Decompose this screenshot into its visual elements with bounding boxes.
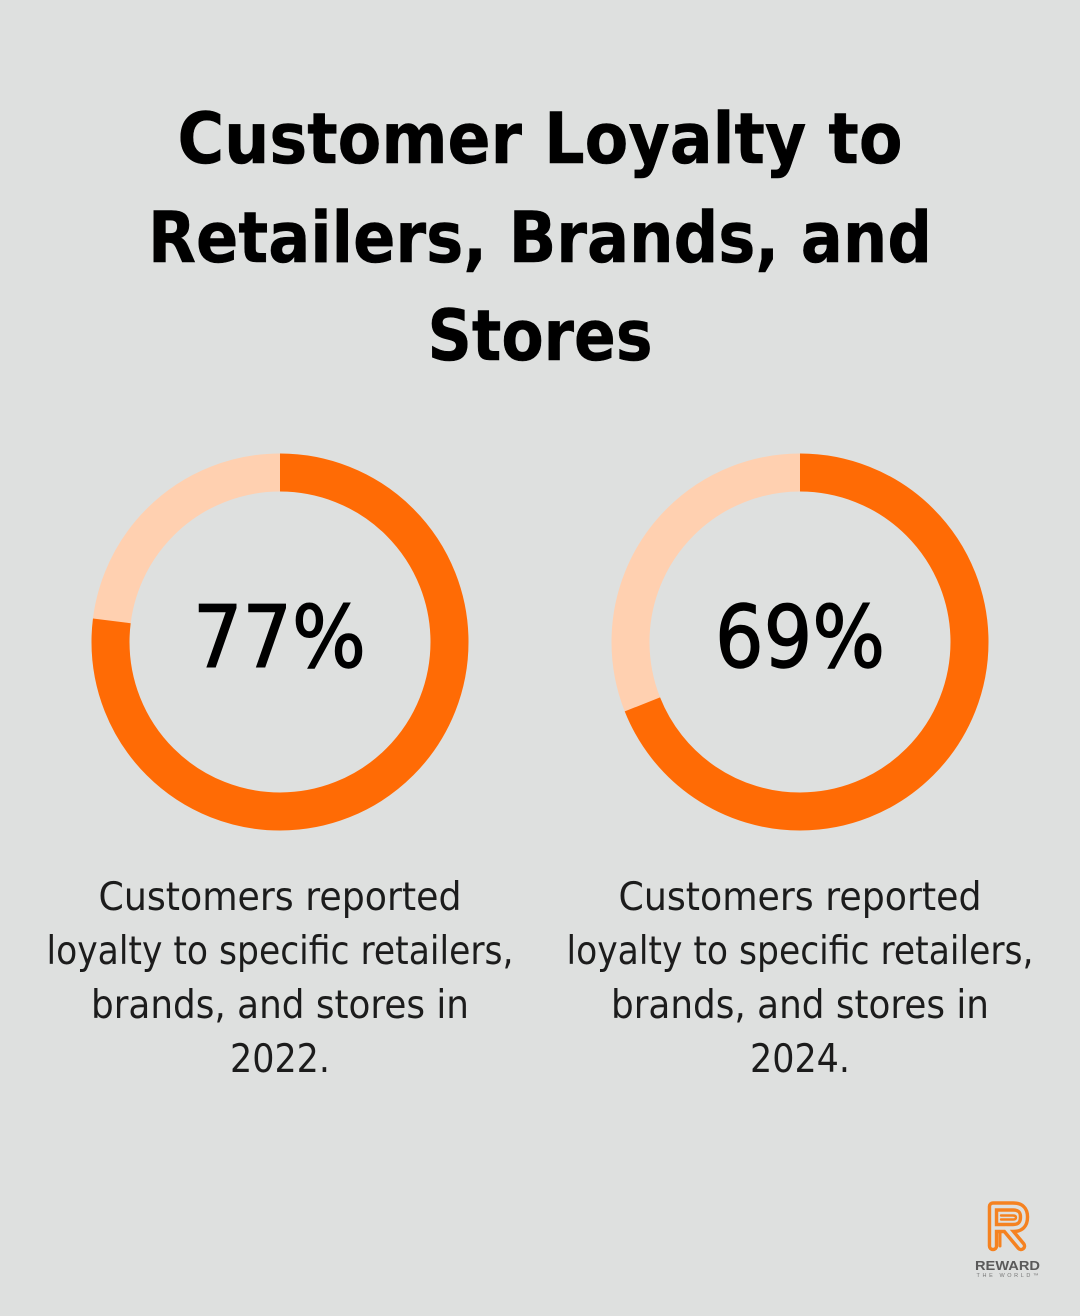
icon: R mark <box>993 1206 1024 1246</box>
description: 2022: Customers reported <box>98 875 462 920</box>
title <box>148 98 932 377</box>
title: Stores <box>428 295 652 377</box>
description: 2024: 2024. <box>750 1037 850 1082</box>
title: Customer Loyalty to <box>178 98 902 180</box>
tagline: THE WORLD™ <box>976 1273 1038 1279</box>
description: 2022 <box>46 875 514 1082</box>
panel: 2022 statistic <box>46 472 514 1082</box>
donut chart: 77% <box>110 472 450 812</box>
description: 2024: Customers reported <box>618 875 982 920</box>
title: Retailers, Brands, and <box>148 197 932 279</box>
description: 2022: 2022. <box>230 1037 330 1082</box>
description: 2022: loyalty to specific retailers, <box>46 929 514 974</box>
value: 69%: 69% <box>715 588 885 688</box>
panel: 2024 statistic <box>566 472 1034 1082</box>
description: 2022: brands, and stores in <box>91 983 469 1028</box>
donut chart: 69% <box>630 472 970 812</box>
wordmark: REWARD <box>975 1258 1040 1273</box>
logo: Reward the World <box>975 1206 1040 1279</box>
description: 2024 <box>566 875 1034 1082</box>
value: 77%: 77% <box>193 588 366 688</box>
description: 2024: loyalty to specific retailers, <box>566 929 1034 974</box>
description: 2024: brands, and stores in <box>611 983 989 1028</box>
